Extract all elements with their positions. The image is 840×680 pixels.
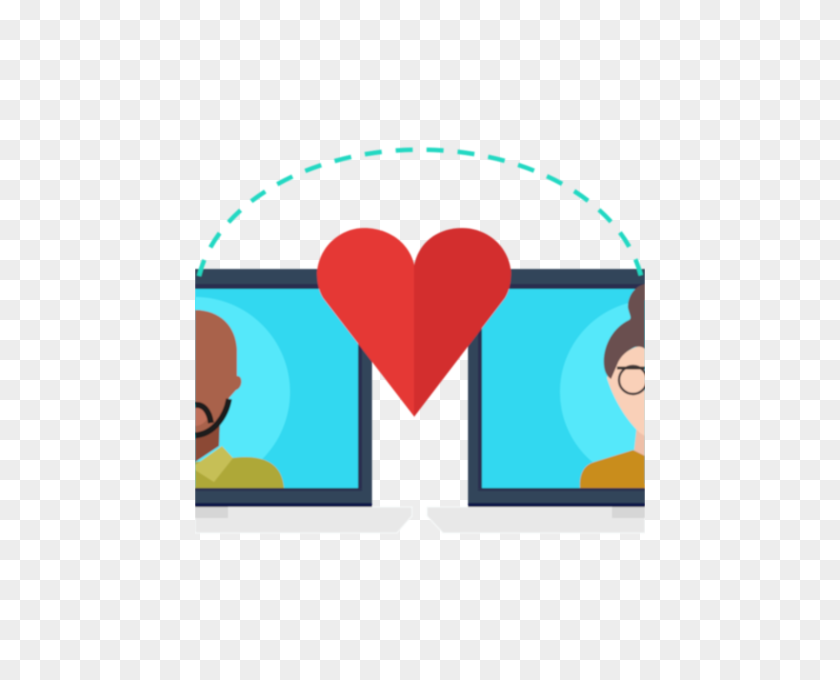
- collar: [195, 446, 233, 482]
- shirt: [580, 450, 645, 488]
- laptop bezel: left: [195, 269, 372, 507]
- screen glow: left: [195, 296, 290, 488]
- laptop: right: [427, 268, 645, 533]
- shirt: [195, 457, 284, 488]
- laptop screen: left: [195, 289, 358, 488]
- hair: [604, 284, 645, 379]
- person: man: [195, 310, 284, 488]
- laptop base: left: [195, 507, 412, 533]
- mouth: [195, 408, 208, 426]
- icon: heart: [317, 228, 511, 417]
- head: [195, 310, 241, 436]
- laptop base: right: [427, 507, 645, 533]
- laptop screen: right: [482, 289, 645, 488]
- laptop: left: [195, 268, 408, 533]
- person: woman: [580, 284, 647, 488]
- laptop bezel: right: [468, 269, 645, 507]
- face: [607, 345, 645, 436]
- neck: [195, 420, 220, 462]
- screen glow: right: [560, 300, 645, 485]
- dashed arc: [199, 150, 641, 276]
- neck: [633, 429, 645, 456]
- beard: [195, 399, 229, 436]
- glasses: [617, 366, 647, 394]
